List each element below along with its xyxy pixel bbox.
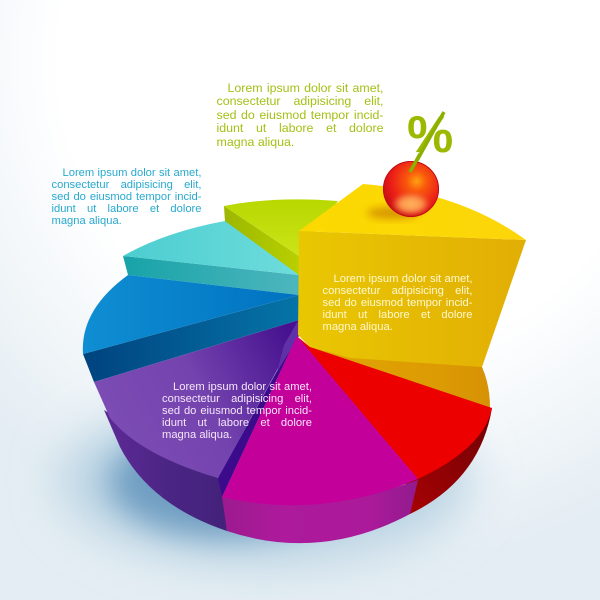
text block: green <box>216 81 384 149</box>
text block: blue: magna aliqua. <box>52 215 122 227</box>
slice: yellow <box>298 184 526 367</box>
text block: blue: consectetur adipisicing elit, <box>52 179 202 191</box>
text block: yellow: consectetur adipisicing elit, <box>322 285 472 297</box>
slice: lime <box>224 199 338 276</box>
text block: purple: consectetur adipisicing elit, <box>162 393 312 405</box>
slice: magenta <box>222 336 418 543</box>
slice: purple <box>94 319 299 531</box>
text block: yellow: idunt ut labore et dolore <box>322 309 472 321</box>
cherry stem base <box>410 154 420 172</box>
slice: blue <box>83 275 299 382</box>
cherry shadow <box>367 207 419 219</box>
text block: purple: magna aliqua. <box>162 429 232 441</box>
text block: blue: idunt ut labore et dolore <box>52 203 202 215</box>
text block: blue: sed do eiusmod tempor incid- <box>52 191 202 203</box>
text block: green: magna aliqua. <box>216 135 294 149</box>
text block: blue <box>52 167 202 227</box>
text block: yellow: sed do eiusmod tempor incid- <box>322 297 472 309</box>
text block: blue: Lorem ipsum dolor sit amet, <box>62 167 202 179</box>
text block: yellow <box>322 273 472 333</box>
slice: teal <box>123 221 299 295</box>
text block: green: Lorem ipsum dolor sit amet, <box>228 81 384 95</box>
slice: red <box>298 337 492 514</box>
text block: yellow: magna aliqua. <box>322 321 393 333</box>
text block: purple <box>162 381 312 441</box>
text block: green: consectetur adipisicing elit, <box>216 94 384 108</box>
text block: green: idunt ut labore et dolore <box>216 121 384 135</box>
text block: green: sed do eiusmod tempor incid- <box>216 108 384 122</box>
cherry stem <box>410 112 444 173</box>
pie shadow <box>60 398 470 562</box>
percent sign: % <box>407 106 453 164</box>
slice: orange side <box>310 340 490 408</box>
text block: purple: sed do eiusmod tempor incid- <box>162 405 312 417</box>
icon: cherry <box>383 161 439 217</box>
text block: purple: idunt ut labore et dolore <box>162 417 312 429</box>
text block: purple: Lorem ipsum dolor sit amet, <box>173 381 312 393</box>
text block: yellow: Lorem ipsum dolor sit amet, <box>334 273 472 285</box>
